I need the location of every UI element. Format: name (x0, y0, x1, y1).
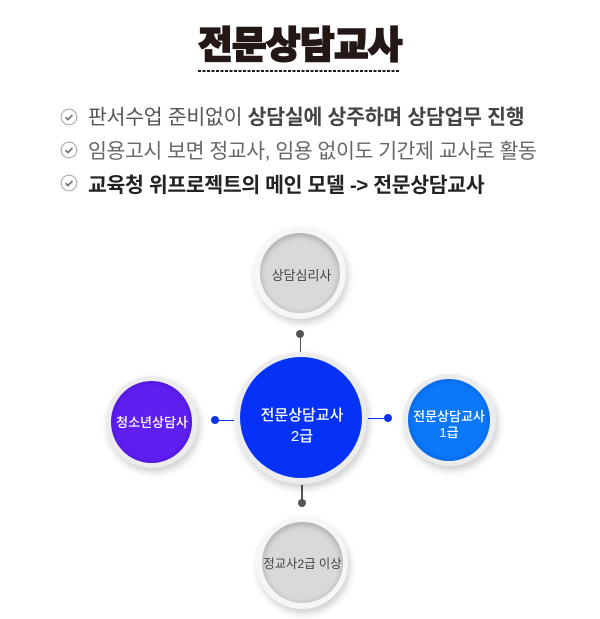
connector: top (296, 330, 304, 352)
connector: left (211, 416, 234, 424)
bullet 3: 교육청 위프로젝트의 메인 모델 -> 전문상담교사 (88, 174, 484, 197)
connector: right (368, 414, 392, 422)
node: left 청소년상담사 (106, 376, 198, 468)
node: top 상담심리사 (254, 227, 346, 319)
node: right 전문상담교사 1급: 1급 (439, 425, 459, 440)
bullet 2: 임용고시 보면 정교사, 임용 없이도 기간제 교사로 활동 (88, 140, 536, 163)
node: top 상담심리사: 상담심리사 (272, 268, 331, 282)
node: bottom 정교사2급 이상: 정교사2급 이상 (263, 557, 342, 571)
bullet 1: 판서수업 준비없이 상담실에 상주하며 상담업무 진행 (88, 106, 524, 129)
title dashed underline (198, 70, 400, 72)
title: 전문상담교사 (198, 24, 402, 66)
bullet list (60, 106, 536, 197)
node: right 전문상담교사 1급: 전문상담교사 (413, 409, 485, 424)
connector: bottom (298, 485, 306, 507)
node: center 전문상담교사 2급 (235, 352, 367, 484)
node: bottom 정교사2급 이상 (256, 517, 348, 609)
node: center 전문상담교사 2급: 전문상담교사 (261, 407, 343, 424)
node: center 전문상담교사 2급: 2급 (291, 428, 313, 445)
node: right 전문상담교사 1급 (403, 374, 496, 466)
node: left 청소년상담사: 청소년상담사 (116, 415, 188, 430)
